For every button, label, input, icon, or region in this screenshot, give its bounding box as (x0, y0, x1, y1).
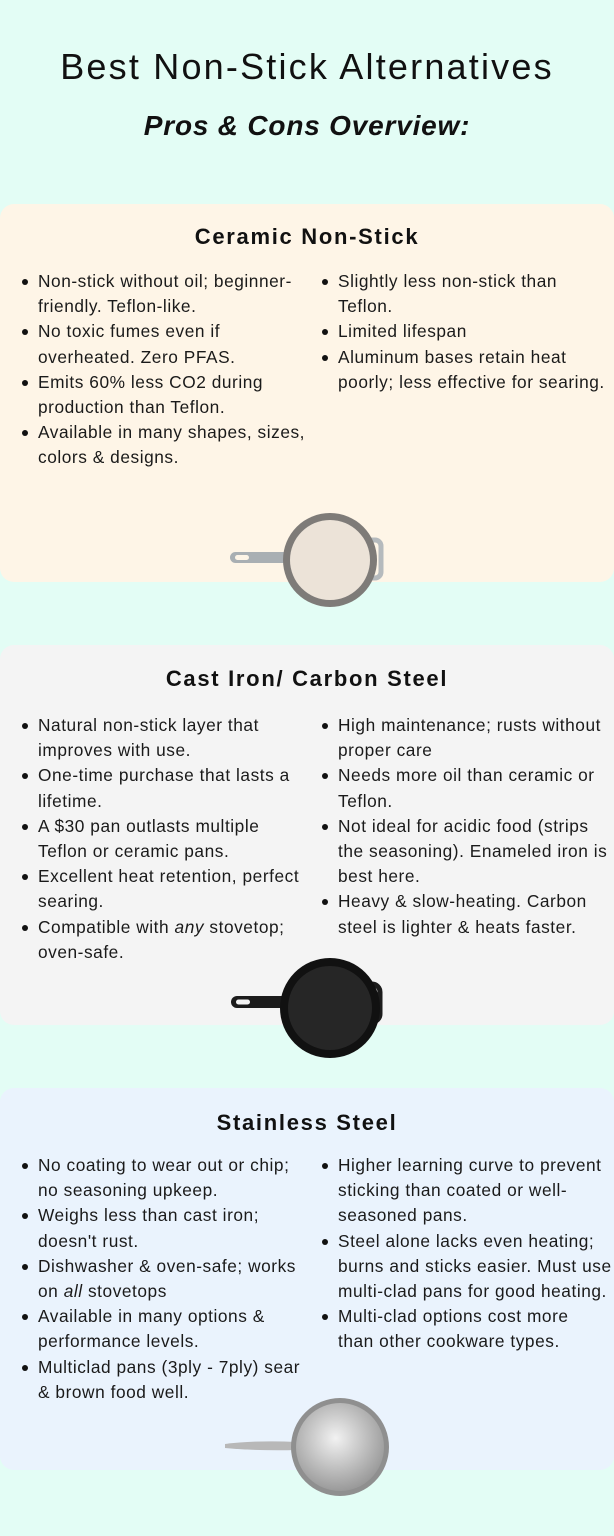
cons: cast iron: Not ideal for acidic food (strips the seasoning). Enameled iron is best here. (338, 816, 607, 886)
pros: cast iron: Natural non-stick layer that improves with use. (38, 715, 259, 760)
cons: stainless: Steel alone lacks even heating; burns and sticks easier. Must use multi-clad pans for good heating. (338, 1231, 612, 1301)
pros: stainless: Weighs less than cast iron; doesn't rust. (38, 1205, 259, 1251)
cons: stainless: Multi-clad options cost more (338, 1306, 569, 1326)
icon: ceramic pan (230, 513, 384, 607)
cons: ceramic (322, 271, 605, 392)
cons: ceramic: Aluminum bases retain heat poorly; less effective for searing. (338, 347, 605, 392)
icon: cast iron pan (231, 958, 382, 1058)
pros: stainless: Multiclad pans (3ply - 7ply) sear & brown food well. (38, 1357, 300, 1402)
cons: cast iron (322, 715, 607, 937)
cons: ceramic: Slightly less non-stick than Teflon. (338, 271, 557, 316)
panel: ceramic (0, 204, 614, 582)
pros: cast iron (22, 715, 299, 962)
pros: ceramic: No toxic fumes even if overheated. Zero PFAS. (38, 321, 236, 367)
pros: ceramic: Non-stick without oil; beginner-friendly. Teflon-like. (38, 271, 292, 316)
cons: cast iron: Heavy & slow-heating. Carbon steel is lighter & heats faster. (338, 891, 587, 937)
pros: ceramic (22, 271, 305, 467)
icon: stainless pan (225, 1398, 389, 1496)
pros: stainless: Dishwasher & oven-safe; works on all stovetops (38, 1256, 296, 1301)
subtitle: Pros & Cons Overview: (144, 110, 470, 141)
pros: cast iron: One-time purchase that lasts a lifetime. (38, 765, 290, 811)
cons: cast iron: Needs more oil than ceramic or Teflon. (338, 765, 595, 811)
heading: stainless: Stainless Steel (217, 1110, 397, 1135)
cons: stainless: than other cookware types. (338, 1331, 560, 1351)
cons: stainless (322, 1155, 612, 1351)
pros: ceramic: Emits 60% less CO2 during production than Teflon. (38, 372, 263, 417)
title: Best Non-Stick Alternatives (60, 46, 554, 87)
pros: stainless: No coating to wear out or chip; no seasoning upkeep. (38, 1155, 289, 1200)
cons: ceramic: Limited lifespan (338, 321, 467, 341)
heading: ceramic: Ceramic Non-Stick (195, 224, 419, 249)
panel: cast iron (0, 645, 614, 1025)
pros: ceramic: Available in many shapes, sizes, colors & designs. (38, 422, 305, 467)
pros: cast iron: A $30 pan outlasts multiple Teflon or ceramic pans. (38, 816, 259, 861)
cons: cast iron: High maintenance; rusts without proper care (338, 715, 601, 760)
pros: stainless (22, 1155, 300, 1402)
panel: stainless (0, 1088, 614, 1470)
heading: cast iron: Cast Iron/ Carbon Steel (166, 666, 448, 691)
pros: cast iron: Excellent heat retention, perfect searing. (38, 866, 299, 911)
pros: cast iron: Compatible with any stovetop; oven-safe. (38, 917, 284, 962)
pros: stainless: Available in many options & performance levels. (38, 1306, 265, 1351)
cons: stainless: Higher learning curve to prevent sticking than coated or well-seasoned pans. (338, 1155, 602, 1225)
